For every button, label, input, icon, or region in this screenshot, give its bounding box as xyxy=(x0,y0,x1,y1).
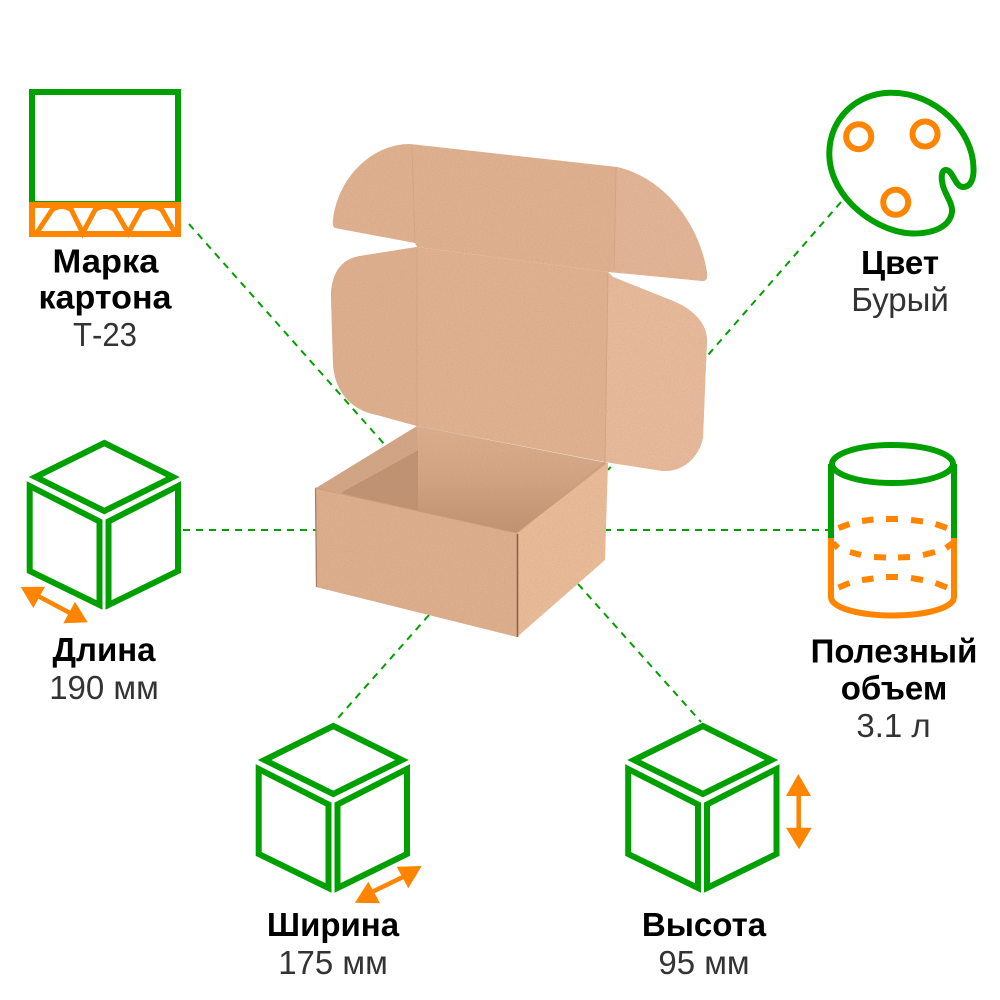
icon: width cube xyxy=(259,726,422,903)
label: height: Высота xyxy=(642,906,767,943)
left side flap xyxy=(331,247,417,426)
label: height: 95 мм xyxy=(658,944,750,981)
label: colour: Цвет xyxy=(861,244,939,281)
lower lid panel xyxy=(331,247,707,471)
box fold lines xyxy=(315,146,616,637)
icon: height cube xyxy=(628,726,812,888)
label: usable volume: Полезный xyxy=(811,632,977,670)
box front face xyxy=(315,488,517,637)
right side flap xyxy=(605,272,707,471)
label: board grade: Т-23 xyxy=(73,316,137,353)
icon: volume cylinder xyxy=(831,445,954,616)
label: width: 175 мм xyxy=(278,944,388,981)
upper lid flap xyxy=(333,144,707,281)
icon: palette xyxy=(829,93,974,234)
open cardboard box xyxy=(315,144,707,637)
label: length: Длина xyxy=(52,631,156,668)
box right face xyxy=(517,463,608,637)
upper right flap xyxy=(612,167,707,281)
label: usable volume xyxy=(811,632,977,744)
label: usable volume: объем xyxy=(841,670,947,706)
dashed connector lines xyxy=(183,202,841,722)
label: width xyxy=(267,906,400,981)
label: length xyxy=(49,631,159,706)
label: board grade: картона xyxy=(38,278,172,316)
icon: length cube xyxy=(21,443,178,623)
label: height xyxy=(642,906,767,981)
left inner wall rim xyxy=(316,426,418,493)
back wall xyxy=(417,426,608,533)
label: length: 190 мм xyxy=(49,669,159,706)
label: board grade xyxy=(38,242,172,353)
left inner wall xyxy=(340,450,418,512)
label: colour xyxy=(851,244,949,318)
label: board grade: Марка xyxy=(52,242,159,280)
label: colour: Бурый xyxy=(851,281,949,318)
icon: corrugated board xyxy=(32,92,178,234)
label: usable volume: 3.1 л xyxy=(856,707,931,744)
label: width: Ширина xyxy=(267,906,400,943)
